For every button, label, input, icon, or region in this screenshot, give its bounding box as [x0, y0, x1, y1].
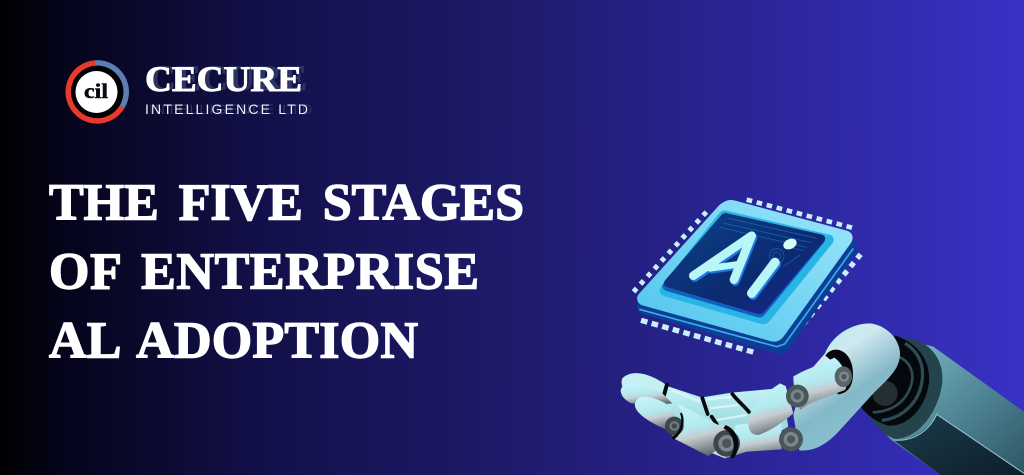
joints: fingers	[665, 413, 803, 458]
chip Ai lettering	[693, 236, 798, 295]
forearm	[870, 338, 1024, 475]
elbow and palm	[793, 323, 900, 450]
logo tagline: INTELLIGENCE LTD	[145, 101, 308, 117]
finger highlights	[672, 390, 747, 420]
chip body side	[637, 240, 857, 354]
illustration: robot arm	[793, 323, 1024, 475]
title: THE FIVE STAGES	[49, 174, 524, 232]
title: AL ADOPTION	[49, 312, 418, 370]
icon: cil ring	[66, 61, 128, 123]
illustration: robot fingers	[621, 373, 809, 459]
chip traces	[720, 218, 817, 267]
thumb	[748, 383, 793, 435]
wrist rings	[861, 336, 929, 426]
joint: thumb	[786, 385, 809, 407]
front finger middle	[672, 403, 727, 456]
finger base	[665, 385, 788, 458]
chip core bevel	[662, 213, 825, 317]
palm socket	[825, 350, 853, 394]
logo name: CECURE	[149, 58, 307, 98]
wrist collar	[868, 338, 942, 439]
title	[49, 174, 524, 370]
finger joint gaps	[664, 385, 749, 424]
wrist hub	[872, 381, 898, 406]
front fingertip	[635, 397, 675, 431]
front finger base	[725, 419, 782, 459]
upper knuckle link	[793, 358, 847, 410]
logo tagline: INTELLIGENCE LTD	[149, 101, 312, 117]
illustration: AI chip	[633, 200, 861, 354]
back fingertips	[621, 373, 672, 405]
logo name: CECURE	[145, 59, 302, 99]
joint: wrist	[835, 366, 852, 387]
chip body top	[637, 200, 853, 342]
forearm lower panel	[893, 414, 1024, 475]
chip pins	[633, 200, 861, 352]
chip inner rim	[660, 210, 834, 324]
logo	[66, 58, 312, 123]
chip core	[664, 213, 825, 314]
icon: cil ring: cil	[84, 79, 108, 103]
title: OF ENTERPRISE	[49, 244, 479, 300]
